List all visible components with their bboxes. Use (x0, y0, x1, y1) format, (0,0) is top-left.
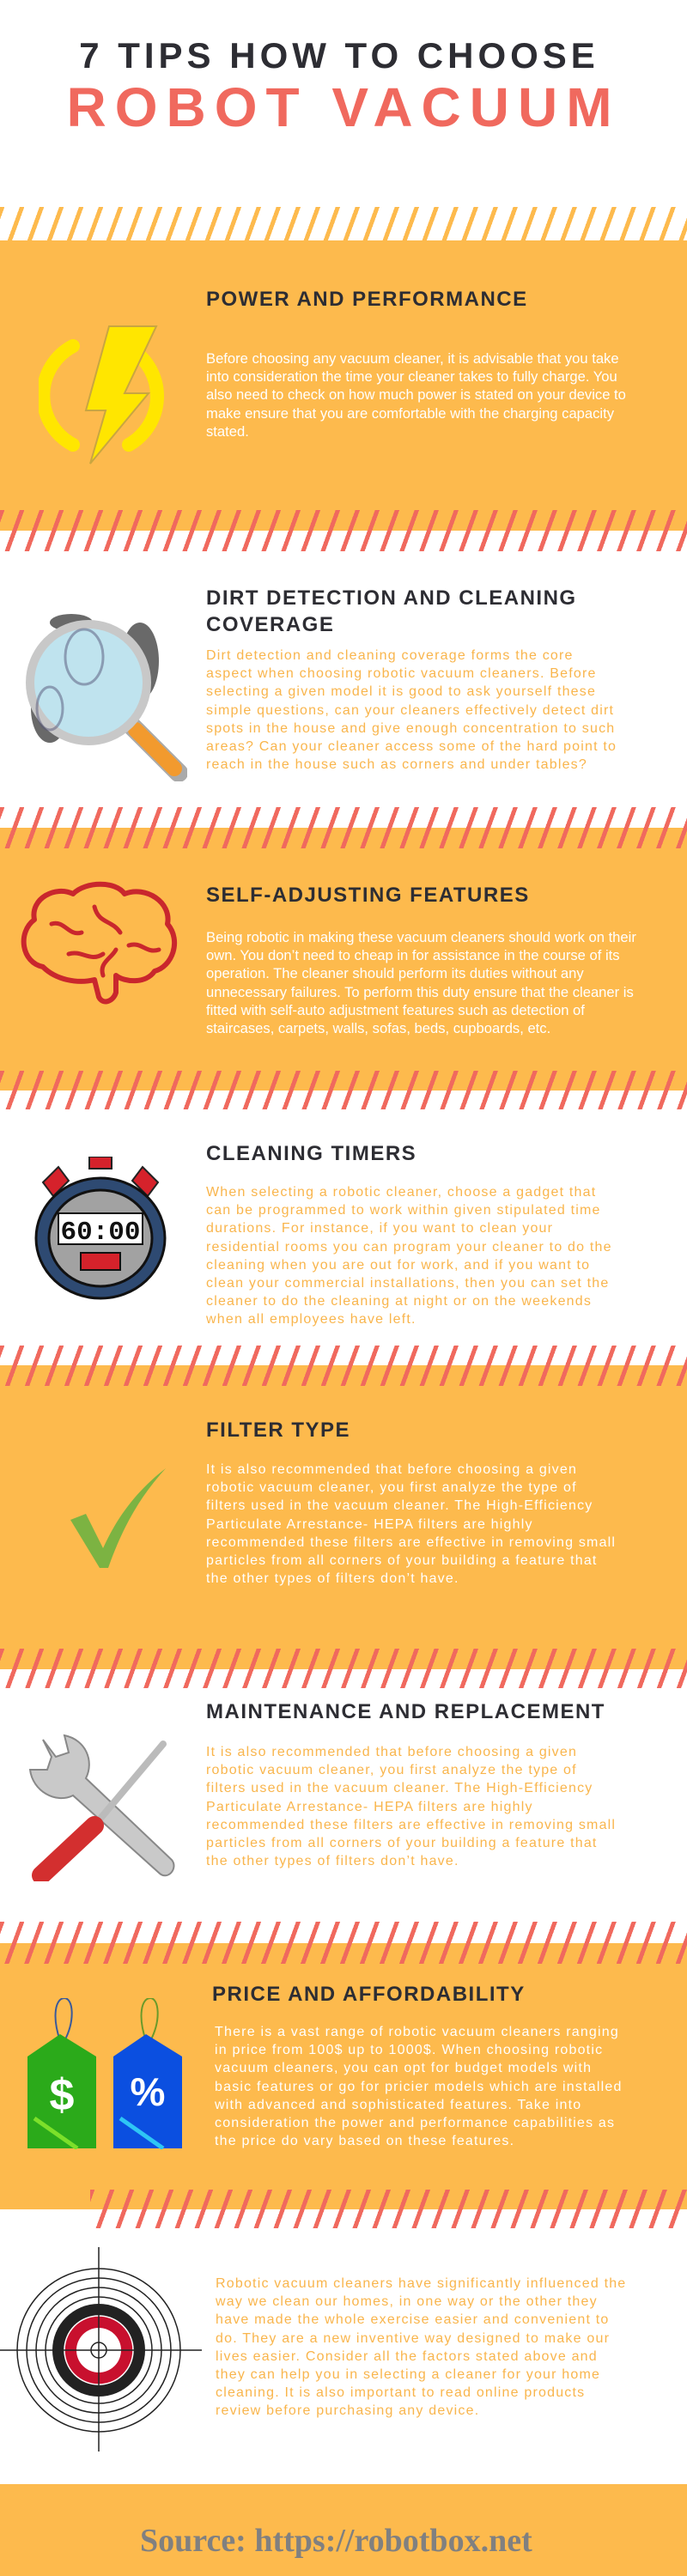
text: particles from all corners of your building a feature that (206, 1553, 598, 1568)
text: when all employees have left. (206, 1312, 416, 1327)
icon: price tags: % (131, 2069, 165, 2114)
text: areas? Can your cleaner access some of the hard point to (206, 739, 617, 754)
text (215, 2025, 623, 2148)
text: fitted with self-auto adjustment features such as detection of (206, 1002, 585, 1018)
text: recommended these filters are effective in removing small (206, 1818, 616, 1832)
text (206, 1462, 616, 1586)
footer (0, 2484, 687, 2576)
text: aspect when choosing robotic vacuum cleaners. Before (206, 666, 597, 681)
panel: conclusion (0, 2247, 626, 2451)
text: cleaning. It is also important to read online products (216, 2385, 585, 2400)
stripe band (0, 1071, 687, 1109)
text: residential rooms you can program your cleaner to do the (206, 1240, 612, 1255)
panel: filter type (0, 1386, 687, 1669)
text (206, 350, 626, 440)
stripe band (0, 2190, 687, 2228)
title line 2: ROBOT VACUUM (67, 76, 620, 138)
text: clean your commercial installations, then you can set the (206, 1276, 610, 1291)
icon: target (0, 2247, 202, 2451)
text: basic features or go for pricier models which are installed (215, 2080, 623, 2094)
text (206, 929, 636, 1036)
text: they can help you in selecting a cleaner for your home (216, 2367, 600, 2382)
icon: brain (21, 881, 177, 1005)
icon: wrench and screwdriver (29, 1735, 175, 1881)
text (206, 1185, 612, 1327)
text: Particulate Arrestance- HEPA filters are highly (206, 1800, 533, 1814)
text: consideration the power and performance capabilities as (215, 2116, 615, 2130)
panel: cleaning timers (34, 1142, 612, 1327)
text: way we clean our homes, in one way or the other they (216, 2294, 598, 2309)
text: simple questions, can your cleaners effectively detect dirt (206, 703, 614, 718)
text (206, 1745, 616, 1868)
text: reach in the house such as corners and under tables? (206, 757, 587, 772)
text: cleaner to do the cleaning at night or on the weekends (206, 1294, 592, 1309)
text: selecting a given model it is good to ask yourself these (206, 684, 596, 699)
icon: lightning (39, 325, 164, 464)
text: own. You don’t need to cheap in for assistance in the course of its (206, 947, 620, 963)
text: recommended these filters are effective in removing small (206, 1535, 616, 1550)
text: also need to check on how much power is stated on your device to (206, 386, 626, 403)
text: staircases, carpets, walls, sofas, beds, cupboards, etc. (206, 1020, 550, 1036)
panel: self-adjusting (0, 848, 687, 1091)
icon: stopwatch: 60:00 (60, 1218, 141, 1248)
text (216, 2276, 626, 2418)
panel: power and performance (0, 240, 687, 531)
text: robotic vacuum cleaner, you first analyze the type of (206, 1763, 577, 1777)
text: can be programmed to work within given stipulated time (206, 1203, 601, 1218)
text: filters used in the vacuum cleaner. The High-Efficiency (206, 1498, 593, 1513)
source text: Source: https://robotbox.net (140, 2523, 532, 2559)
heading: COVERAGE (206, 613, 334, 636)
heading: POWER AND PERFORMANCE (206, 288, 528, 311)
text: vacuum cleaners, you can opt for budget models with (215, 2061, 592, 2075)
text: It is also recommended that before choosing a given (206, 1462, 577, 1477)
icon: stopwatch (34, 1157, 167, 1300)
text: Dirt detection and cleaning coverage forms the core (206, 648, 574, 663)
text: unnecessary failures. To perform this duty ensure that the cleaner is (206, 984, 634, 1000)
text: There is a vast range of robotic vacuum cleaners ranging (215, 2025, 619, 2039)
text: Robotic vacuum cleaners have significantly influenced the (216, 2276, 626, 2291)
text: do. They are a new inventive way designed to make our (216, 2331, 610, 2346)
heading: FILTER TYPE (206, 1419, 350, 1442)
text: the price do vary based on these features. (215, 2134, 514, 2148)
text: operation. The cleaner should perform its duties without any (206, 965, 584, 981)
panel: price (0, 1964, 687, 2209)
text: filters used in the vacuum cleaner. The High-Efficiency (206, 1781, 593, 1795)
title line 1: 7 TIPS HOW TO CHOOSE (79, 35, 599, 76)
stripe band (0, 510, 687, 551)
text: spots in the house and give enough concentration to such (206, 721, 615, 736)
text: lives easier. Consider all the factors stated above and (216, 2349, 598, 2364)
text: make ensure that you are comfortable with the charging capacity (206, 405, 614, 422)
text: Being robotic in making these vacuum cleaners should work on their (206, 929, 636, 945)
text: It is also recommended that before choosing a given (206, 1745, 577, 1759)
stripe band (0, 1922, 687, 1964)
heading: DIRT DETECTION AND CLEANING (206, 586, 577, 610)
text: robotic vacuum cleaner, you first analyze the type of (206, 1480, 577, 1495)
text: particles from all corners of your building a feature that (206, 1836, 598, 1850)
text: have made the whole exercise easier and convenient to (216, 2312, 610, 2327)
text: durations. For instance, if you want to clean your (206, 1221, 553, 1236)
panel: dirt detection (26, 586, 617, 781)
icon: price tags: $ (50, 2070, 75, 2120)
panel: maintenance (29, 1700, 616, 1881)
text: review before purchasing any device. (216, 2403, 479, 2418)
text: in price from 100$ up to 1000$. When choosing robotic (215, 2043, 603, 2057)
text: When selecting a robotic cleaner, choose a gadget that (206, 1185, 596, 1200)
stripe band top (0, 207, 687, 240)
heading: PRICE AND AFFORDABILITY (212, 1983, 526, 2006)
stripe band (0, 1346, 687, 1386)
text: the other types of filters don’t have. (206, 1571, 459, 1586)
stripe band (0, 807, 687, 848)
text: stated. (206, 423, 249, 440)
text: the other types of filters don’t have. (206, 1854, 459, 1868)
heading (206, 586, 577, 636)
icon: check mark (70, 1468, 166, 1568)
icon: price tags (27, 1998, 182, 2149)
icon: magnifier (26, 614, 187, 781)
text: with advanced and sophisticated features. Take into (215, 2098, 581, 2112)
heading: CLEANING TIMERS (206, 1142, 416, 1165)
heading: SELF-ADJUSTING FEATURES (206, 884, 530, 907)
text: cleaning when you are out for work, and if you want to (206, 1258, 590, 1273)
text (206, 648, 617, 772)
text: Particulate Arrestance- HEPA filters are highly (206, 1517, 533, 1532)
heading: MAINTENANCE AND REPLACEMENT (206, 1700, 605, 1723)
text: into consideration the time your cleaner takes to fully charge. You (206, 368, 617, 385)
title (67, 35, 620, 138)
stripe band (0, 1649, 687, 1688)
text: Before choosing any vacuum cleaner, it is advisable that you take (206, 350, 619, 367)
